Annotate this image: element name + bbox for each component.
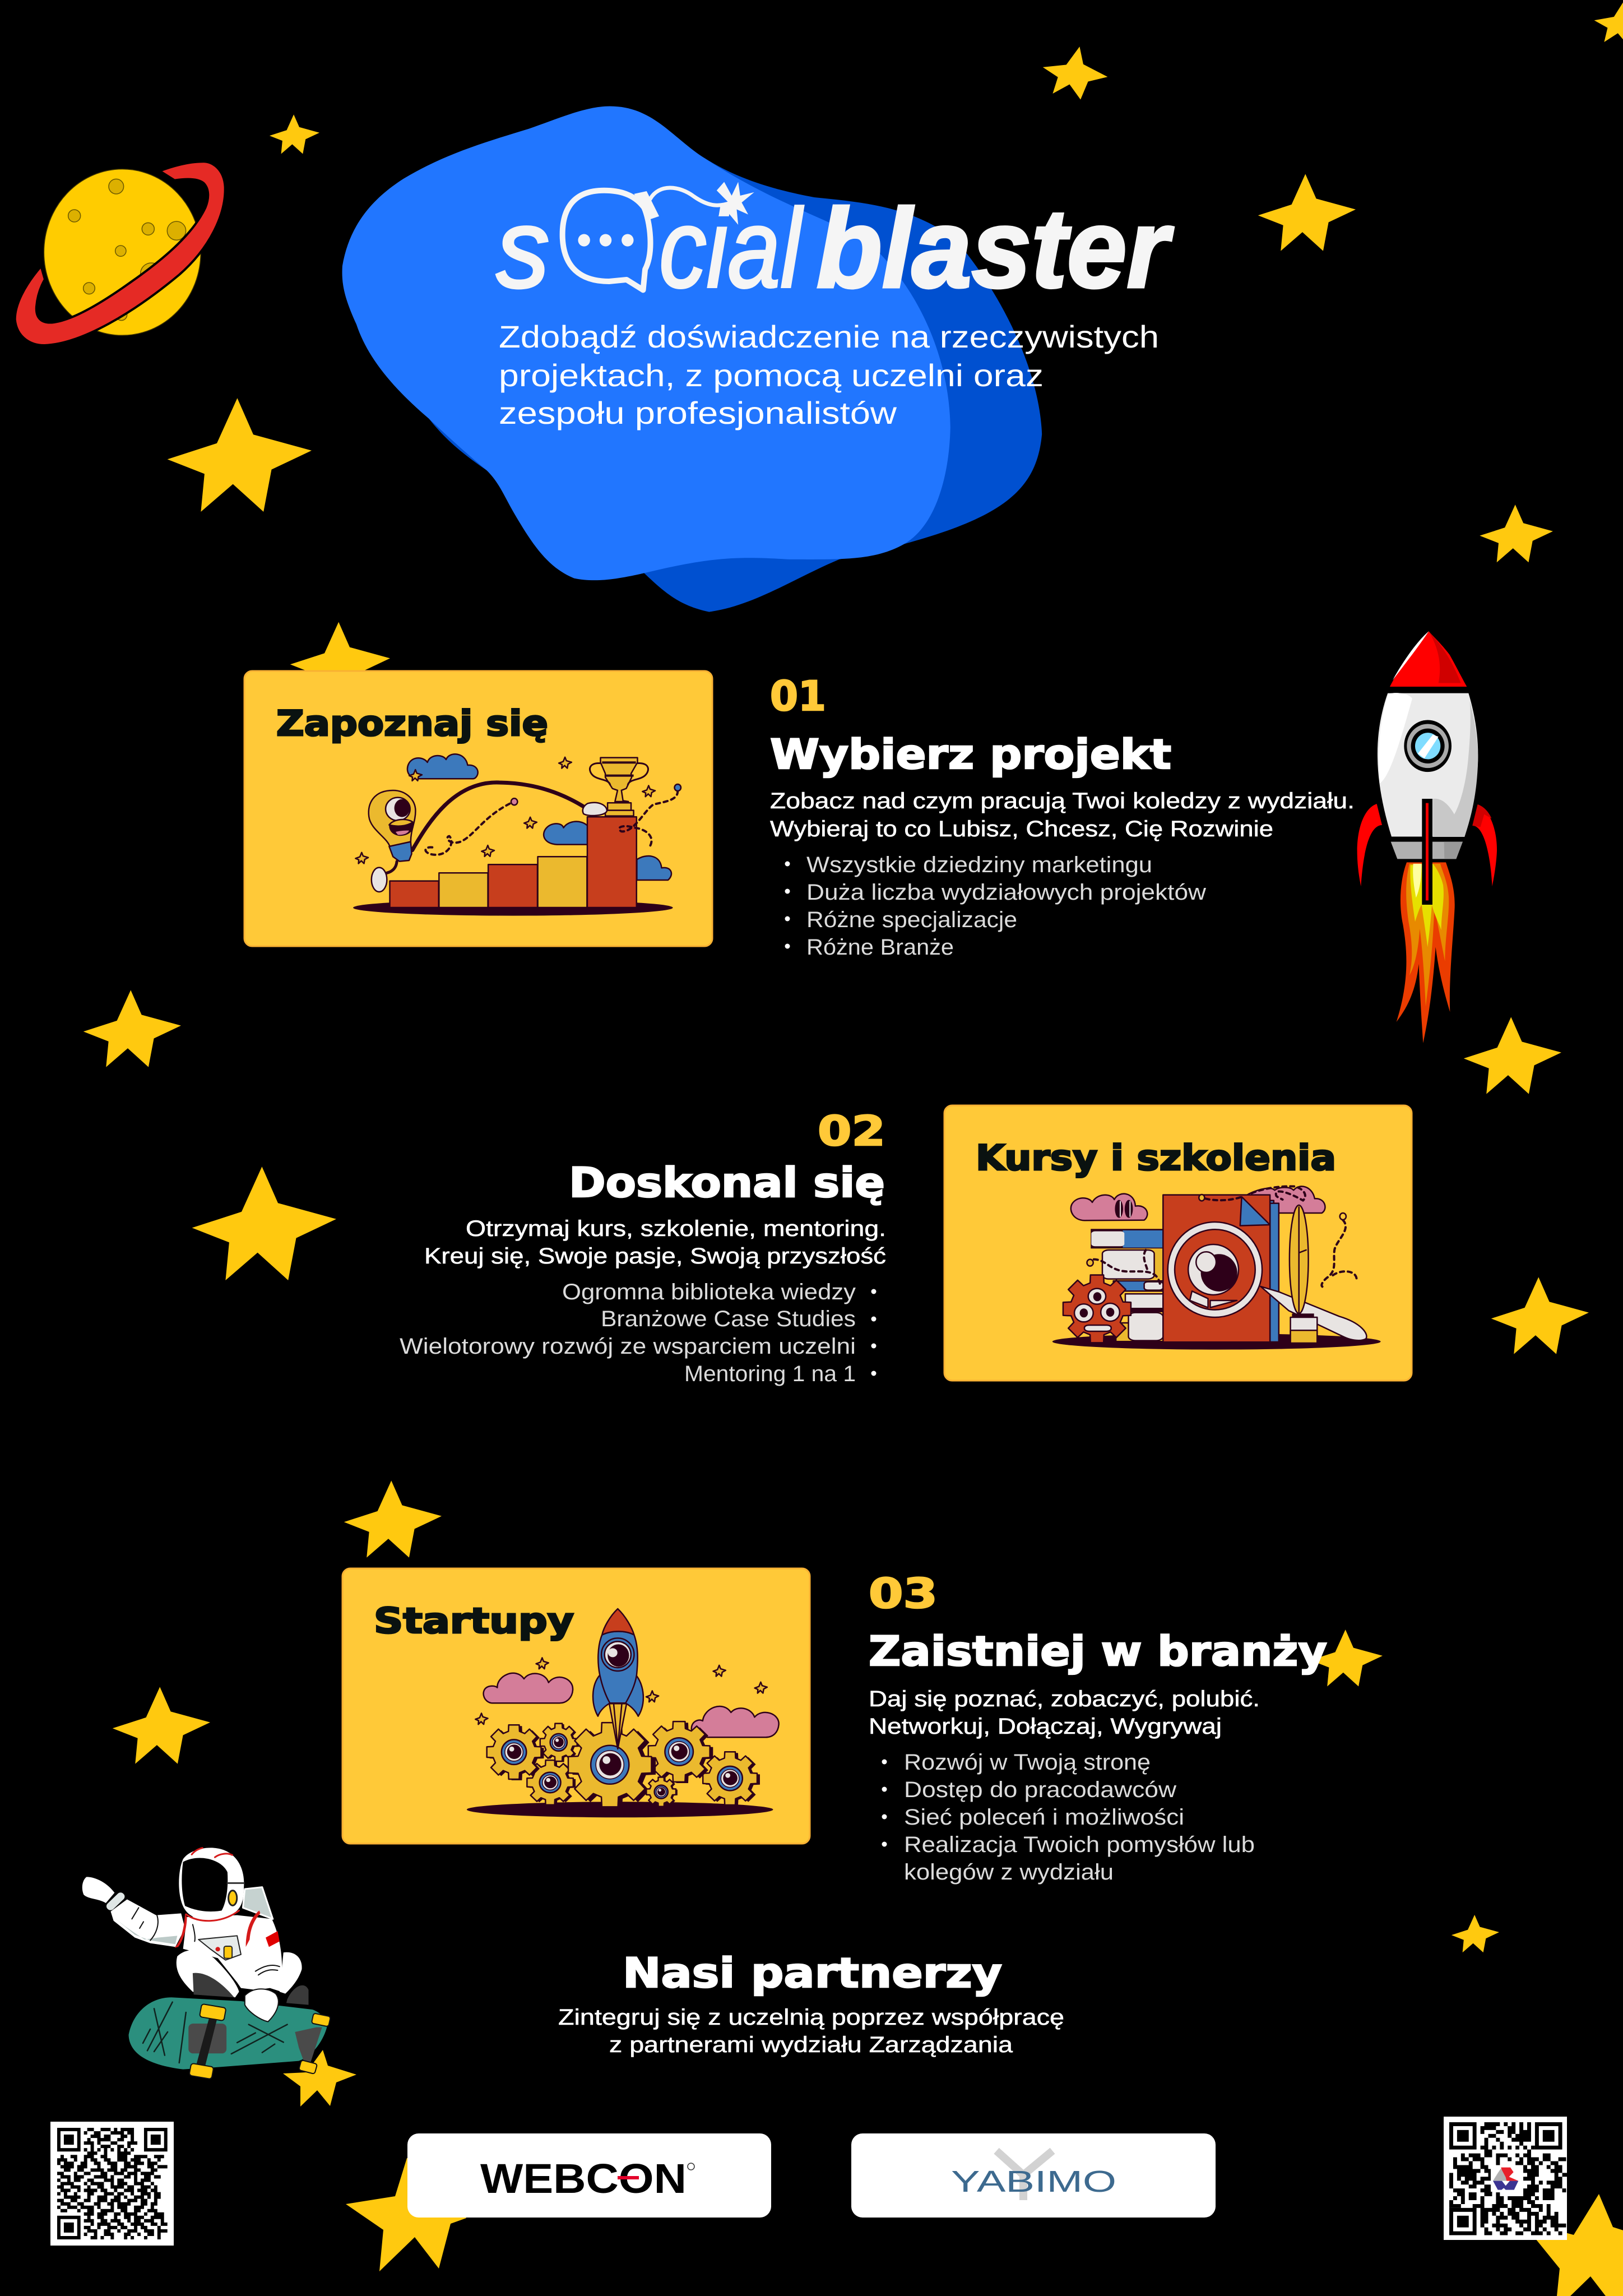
qr code right <box>1444 2117 1570 2240</box>
partner: webcon <box>407 2133 771 2218</box>
star behind webcon <box>346 2158 466 2271</box>
nose <box>1390 631 1467 687</box>
logo s: s <box>497 186 549 311</box>
magnifier <box>1260 1286 1366 1340</box>
partners lead: Zintegruj się z uczelnią poprzez współpracę <box>558 2005 1064 2030</box>
number: 03 <box>869 1570 938 1618</box>
tagline: projektach, z pomocą uczelni oraz <box>499 358 1044 393</box>
bullet list: Wszystkie dziedziny marketingu <box>806 853 1152 877</box>
partner: yabimo: YABIMO <box>951 2165 1116 2198</box>
qr code left <box>50 2122 174 2246</box>
header blob <box>342 107 1042 612</box>
partners lead <box>558 2005 1064 2057</box>
star right 2 <box>1491 1277 1589 1354</box>
flames <box>1397 862 1455 1043</box>
star left large 2 <box>192 1166 336 1280</box>
partner: webcon: WEBCON <box>480 2155 687 2202</box>
skateboard deck <box>129 1997 327 2070</box>
lead: Daj się poznać, zobaczyć, polubić. <box>869 1687 1260 1711</box>
bullet list: Realizacja Twoich pomysłów lub <box>904 1832 1255 1857</box>
left knee and sole <box>177 1950 239 1997</box>
qr centre logo <box>1491 2165 1520 2192</box>
illustration: rocket and gears <box>467 1609 779 1817</box>
star behind card 1 <box>290 622 390 701</box>
partners heading <box>558 1950 1064 2057</box>
glove <box>82 1877 114 1903</box>
bullet list <box>785 853 1206 960</box>
heading: Doskonal się <box>569 1159 885 1207</box>
number: 01 <box>770 673 826 720</box>
bullet list: Ogromna biblioteka wiedzy <box>562 1280 856 1304</box>
red straps and patch <box>174 1914 187 1948</box>
partner: yabimo <box>851 2133 1216 2218</box>
heading: Wybierz projekt <box>770 731 1171 779</box>
bullet list: Branżowe Case Studies <box>601 1307 856 1331</box>
bullet list: Różne Branże <box>806 935 954 960</box>
step 2 text: Kreuj się, Swoje pasje, Swoją przyszłość <box>424 1244 886 1269</box>
card title: Kursy i szkolenia <box>976 1137 1336 1178</box>
panel: step 2 card <box>944 1105 1412 1381</box>
lead: Zobacz nad czym pracują Twoi koledzy z wydziału. <box>770 789 1355 813</box>
star left 3 <box>113 1687 210 1764</box>
logo cial: cial <box>659 186 804 311</box>
wheels <box>200 2004 226 2021</box>
step 2 text <box>400 1108 886 1386</box>
bullet list <box>400 1280 877 1386</box>
tagline: zespołu profesjonalistów <box>499 395 897 430</box>
logo blaster: blaster <box>817 186 1174 311</box>
heading: Zaistniej w branży <box>869 1628 1327 1675</box>
star header right <box>1258 174 1356 251</box>
rocket <box>1357 631 1497 1043</box>
star beside heading 3 <box>1310 1630 1383 1686</box>
bullet list: Różne specjalizacje <box>806 908 1017 932</box>
tagline: Zdobądź doświadczenie na rzeczywistych <box>499 319 1159 354</box>
panel: step 3 card <box>342 1568 810 1844</box>
backpack <box>243 1887 273 1919</box>
feather pen and inkwell <box>1290 1205 1309 1313</box>
step 3 text <box>869 1570 1327 1885</box>
star right 1 <box>1464 1017 1561 1094</box>
illustration: bar steps with lightbulb and trophy <box>353 754 681 916</box>
ring <box>15 161 225 345</box>
bullet list: Sieć poleceń i możliwości <box>904 1805 1184 1830</box>
logo: socialblaster <box>497 182 1174 311</box>
star large left <box>168 398 312 512</box>
body <box>1376 692 1479 839</box>
partners lead: z partnerami wydziału Zarządzania <box>609 2033 1013 2057</box>
trucks <box>188 2024 226 2053</box>
step 1 text <box>770 673 1355 960</box>
star top center <box>1038 40 1112 104</box>
light blob <box>342 107 950 580</box>
centre fin <box>1422 799 1432 905</box>
astronaut on skateboard <box>82 1848 331 2079</box>
torso <box>183 1915 282 1992</box>
star right small <box>1452 1915 1499 1952</box>
star top right corner <box>1592 0 1623 48</box>
craters <box>68 179 186 321</box>
star left 1 <box>84 990 181 1067</box>
card title: Startupy <box>374 1600 574 1641</box>
fins <box>1357 804 1382 886</box>
star above card 3 <box>344 1480 442 1558</box>
pages and cover <box>1249 1201 1274 1343</box>
card title: Zapoznaj się <box>276 703 548 744</box>
hand <box>245 1989 279 2022</box>
window <box>1404 720 1452 772</box>
bullet list: Wielotorowy rozwój ze wsparciem uczelni <box>400 1334 856 1359</box>
lead: Otrzymaj kurs, szkolenie, mentoring. <box>466 1216 886 1241</box>
tagline <box>499 319 1159 430</box>
number: 02 <box>818 1108 885 1155</box>
step 1 text: Wybieraj to co Lubisz, Chcesz, Cię Rozwinie <box>770 817 1273 841</box>
star bottom right corner <box>1521 2194 1623 2296</box>
bullet list: Rozwój w Twoją stronę <box>904 1750 1151 1775</box>
bullet list: Dostęp do pracodawców <box>904 1777 1176 1802</box>
bullet list: kolegów z wydziału <box>904 1860 1114 1885</box>
bullet list: Duża liczba wydziałowych projektów <box>806 880 1206 905</box>
bullet list <box>882 1750 1255 1885</box>
gear creature <box>1063 1275 1131 1343</box>
step 3 text: Networkuj, Dołączaj, Wygrywaj <box>869 1714 1222 1739</box>
dark blob <box>429 158 1042 612</box>
panel: step 1 card <box>244 671 712 946</box>
illustration: books and magnifier <box>1052 1186 1381 1350</box>
logo speech bubble with bomb fuse <box>563 182 754 290</box>
star right <box>1480 504 1553 562</box>
right knee <box>280 1952 302 1994</box>
star under skateboard <box>283 2050 356 2107</box>
arm <box>110 1899 185 1947</box>
books <box>1116 1323 1163 1341</box>
partners heading: Nasi partnerzy <box>623 1950 1002 1997</box>
planet <box>15 161 225 345</box>
chest panel <box>198 1936 241 1960</box>
star top left small <box>270 114 319 154</box>
helmet <box>179 1848 244 1920</box>
bullet list: Mentoring 1 na 1 <box>684 1362 856 1386</box>
